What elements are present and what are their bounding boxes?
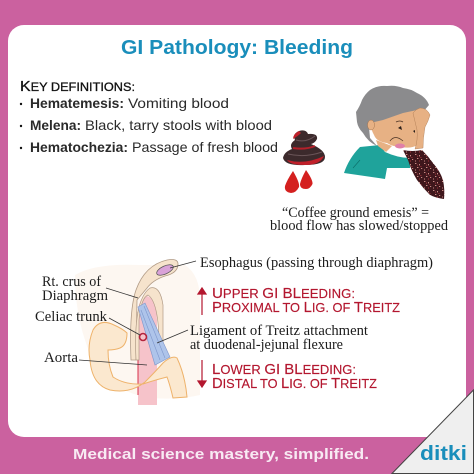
- emesis: [403, 150, 444, 199]
- duodenum: [89, 322, 187, 398]
- logo corner: ditki: [420, 443, 467, 465]
- footer tagline: Medical science mastery, simplified.: [73, 446, 369, 463]
- label: Rt. crus of Diaphragm: [42, 274, 109, 304]
- label: Ligament of Treitz: at duodenal-jejunal flexure: [190, 337, 343, 353]
- mouth: [395, 144, 405, 148]
- upper GI bleeding text: UPPER GI BLEEDING:: [212, 285, 355, 302]
- eyes and brows: [398, 126, 415, 133]
- hair: [356, 86, 429, 146]
- definitions list: Vomiting blood: [128, 95, 229, 111]
- label: Ligament of Treitz: [190, 323, 368, 353]
- upper GI bleeding text: PROXIMAL TO LIG. OF TREITZ: [212, 299, 400, 316]
- icon: vomiting woman: [344, 86, 444, 199]
- definitions list: [20, 95, 278, 155]
- coffee ground caption: “Coffee ground emesis” =: [282, 205, 429, 221]
- label: Ligament of Treitz: Ligament of Treitz attachment: [190, 323, 368, 339]
- lower GI bleeding text: LOWER GI BLEEDING:: [212, 361, 356, 378]
- neck: [376, 140, 392, 152]
- title: GI Pathology: Bleeding: [121, 37, 353, 59]
- icon: stool: [283, 130, 325, 165]
- esophagus: [131, 260, 178, 360]
- celiac trunk: [140, 334, 146, 340]
- lower GI bleeding text: DISTAL TO LIG. OF TREITZ: [212, 375, 377, 392]
- ear: [368, 120, 374, 130]
- ligament of Treitz: [138, 303, 170, 365]
- pointer lines: [79, 261, 196, 365]
- hand: [413, 108, 430, 149]
- definitions list: Passage of fresh blood: [132, 139, 278, 155]
- icon: blood drops: [285, 170, 313, 193]
- label: Esophagus: Esophagus (passing through diaphragm): [200, 255, 433, 271]
- aorta: [138, 296, 157, 405]
- coffee ground caption: [270, 205, 449, 234]
- definitions list: Black, tarry stools with blood: [85, 117, 272, 133]
- coffee ground caption: blood flow has slowed/stopped: [270, 218, 449, 234]
- label: Rt. crus of Diaphragm: Diaphragm: [42, 288, 109, 304]
- face: [370, 110, 418, 148]
- definitions list: Hematemesis:: [30, 95, 124, 111]
- key definitions heading: KEY DEFINITIONS:: [20, 78, 135, 95]
- label: Celiac trunk: Celiac trunk: [35, 309, 108, 325]
- definitions list: Hematochezia:: [30, 139, 128, 155]
- anatomy diagram: [75, 260, 200, 405]
- label: Rt. crus of Diaphragm: Rt. crus of: [42, 274, 101, 290]
- background tissue: [75, 265, 200, 399]
- label: Aorta: Aorta: [44, 350, 79, 366]
- lower GI bleeding text: [212, 361, 377, 392]
- shirt: [344, 145, 410, 179]
- logo corner: [392, 390, 474, 474]
- diaphragm crus: [136, 288, 163, 360]
- arrow: upper: [198, 288, 206, 315]
- arrow: lower: [198, 360, 206, 387]
- upper GI bleeding text: [212, 285, 400, 316]
- definitions list: Melena:: [30, 117, 81, 133]
